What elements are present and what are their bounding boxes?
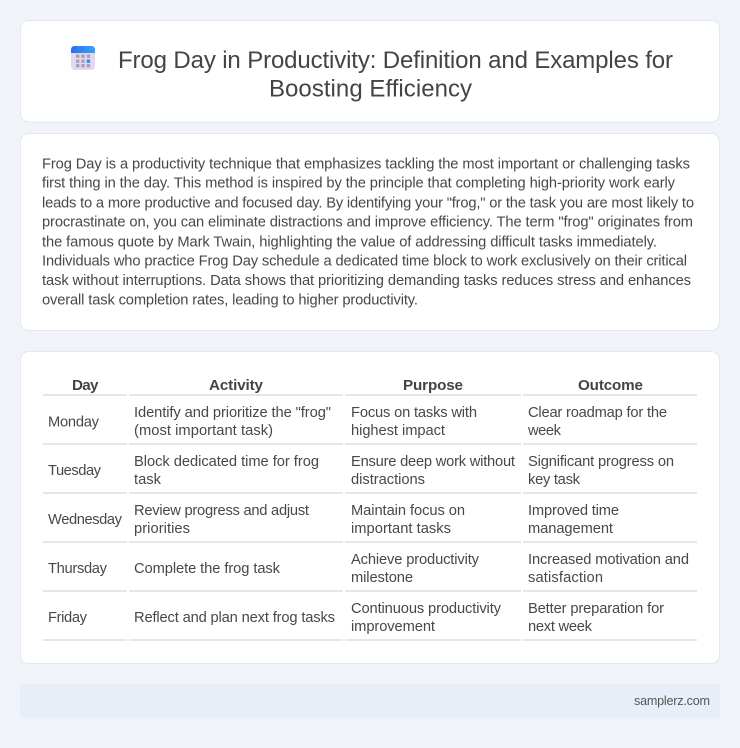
row: Tuesday: task <box>134 472 162 488</box>
row: Thursday: Increased motivation and <box>528 552 689 568</box>
row: Monday: Identify and prioritize the "frog" <box>134 405 331 421</box>
row: Wednesday: priorities <box>134 521 190 537</box>
row: Wednesday: Review progress and adjust <box>134 503 309 519</box>
panel: definition text: procrastinate on, you can eliminate distractions and improve efficiency. The term "frog" originates from <box>42 215 693 231</box>
footer <box>20 684 720 718</box>
row: Tuesday: key task <box>528 472 581 488</box>
row: Monday: (most important task) <box>134 423 273 439</box>
row: Tuesday <box>48 454 674 488</box>
panel: definition text: leads to a more productive and focused day. By identifying your "frog," or the task you are most likely to <box>42 195 694 211</box>
row: Friday: Reflect and plan next frog tasks <box>134 610 335 626</box>
row: Wednesday: Improved time <box>528 503 619 519</box>
table header <box>72 377 643 394</box>
title <box>118 47 673 102</box>
panel: table <box>20 352 720 664</box>
row: Wednesday: Wednesday <box>48 512 123 528</box>
row: Thursday: Thursday <box>48 561 108 577</box>
table header: Activity <box>209 377 264 394</box>
row: Friday <box>48 601 664 635</box>
footer: samplerz.com <box>634 694 710 708</box>
row: Thursday: Complete the frog task <box>134 561 281 577</box>
row: Thursday: milestone <box>351 570 413 586</box>
panel: definition text: first thing in the day. This method is inspired by the principle that completing high-priority work early <box>42 176 676 192</box>
row: Wednesday <box>48 503 619 537</box>
row: Monday: Monday <box>48 414 100 430</box>
row: Wednesday: important tasks <box>351 521 451 537</box>
row: Monday: week <box>527 423 562 439</box>
icon: calendar <box>71 46 95 70</box>
row: Friday: improvement <box>351 619 435 635</box>
panel: definition text: overall task completion rates, leading to higher productivity. <box>42 292 418 308</box>
row: Tuesday: Ensure deep work without <box>351 454 515 470</box>
row: Friday: next week <box>528 619 593 635</box>
panel: definition text <box>20 134 720 330</box>
row: Friday: Friday <box>48 610 88 626</box>
table header: Day <box>72 377 99 394</box>
header panel <box>20 20 720 122</box>
panel: definition text: task without interruptions. Data shows that prioritizing demanding tasks reduces stress and enhances <box>42 273 691 289</box>
panel: definition text: Frog Day is a productivity technique that emphasizes tackling the most important or challenging tasks <box>42 156 690 172</box>
row: Monday <box>48 405 667 439</box>
row: Monday: Clear roadmap for the <box>528 405 667 421</box>
row: Wednesday: management <box>528 521 613 537</box>
panel: definition text: Individuals who practice Frog Day schedule a dedicated time block to work exclusively on their critical <box>42 254 687 270</box>
row: Tuesday: distractions <box>351 472 425 488</box>
row: Monday: highest impact <box>351 423 445 439</box>
row: Monday: Focus on tasks with <box>351 405 477 421</box>
row: Tuesday: Tuesday <box>48 463 102 479</box>
row: Friday: Better preparation for <box>528 601 664 617</box>
row: Wednesday: Maintain focus on <box>351 503 465 519</box>
row: Thursday <box>48 552 689 586</box>
row: Friday: Continuous productivity <box>351 601 502 617</box>
panel: definition text: the famous quote by Mark Twain, highlighting the value of addressing difficult tasks immediately. <box>42 234 657 250</box>
row: Tuesday: Block dedicated time for frog <box>134 454 319 470</box>
title: Boosting Efficiency <box>269 76 472 102</box>
title: Frog Day in Productivity: Definition and Examples for <box>118 47 673 74</box>
row: Thursday: satisfaction <box>528 570 603 586</box>
table header: Outcome <box>578 377 643 394</box>
table header: Purpose <box>403 377 463 394</box>
row: Thursday: Achieve productivity <box>351 552 480 568</box>
row: Tuesday: Significant progress on <box>528 454 674 470</box>
